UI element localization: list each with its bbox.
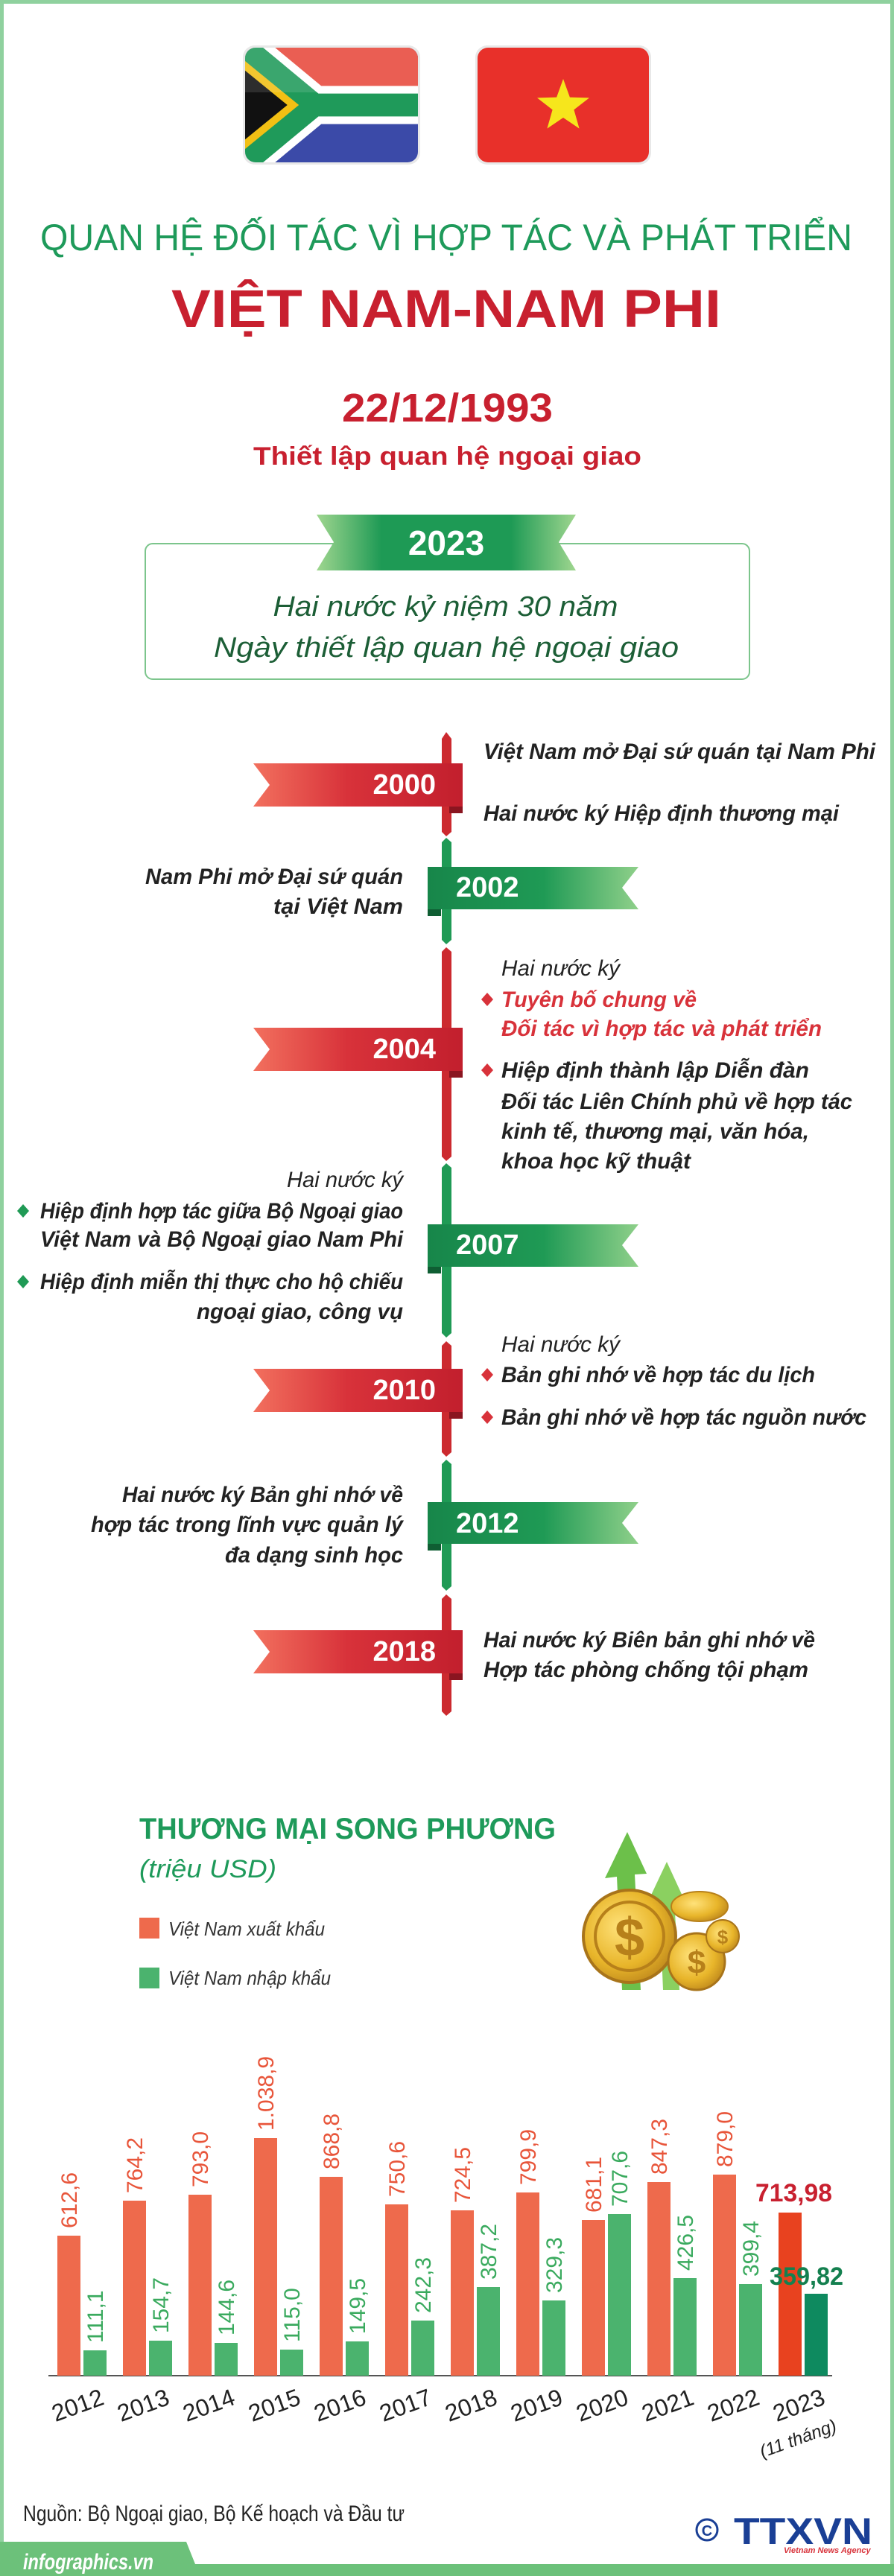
value labels: imports: 144,6 [215, 2280, 239, 2335]
value labels: imports: 329,3 [542, 2237, 567, 2293]
date: 22/12/1993 [342, 386, 553, 430]
value labels: imports: 707,6 [608, 2151, 633, 2207]
ribbon: 2018 [253, 1630, 463, 1680]
ribbon: 2012 [428, 1502, 638, 1551]
title [40, 216, 852, 339]
timeline 2018: Hợp tác phòng chống tội phạm [484, 1658, 808, 1682]
value labels: exports: 847,3 [647, 2119, 672, 2175]
baseline [48, 2375, 832, 2376]
ribbon: 2023: 2023 [408, 524, 484, 562]
year labels: 2023 [770, 2384, 828, 2427]
legend [139, 1918, 331, 1989]
bars: imports (green) [83, 2214, 828, 2376]
value labels: exports: 799,9 [516, 2129, 541, 2185]
bar chart [48, 2056, 843, 2462]
value labels: exports: 724,5 [451, 2147, 475, 2203]
timeline 2000 [253, 740, 876, 826]
source: Nguồn: Bộ Ngoại giao, Bộ Kế hoạch và Đầu tư [23, 2502, 405, 2526]
legend: Việt Nam nhập khẩu [168, 1967, 331, 1989]
timeline 2004: Hai nước ký [501, 956, 621, 981]
icon: coins with arrows [583, 1832, 739, 1990]
bullet: foreign ministry agreement [17, 1199, 404, 1252]
value labels: imports: 149,5 [346, 2278, 370, 2334]
value labels: 2023 [755, 2179, 843, 2291]
timeline 2004 [253, 956, 852, 1174]
heading: bilateral trade: THƯƠNG MẠI SONG PHƯƠNG [139, 1813, 556, 1845]
year labels: 2019 [507, 2384, 566, 2427]
date: Thiết lập quan hệ ngoại giao [253, 442, 641, 471]
heading: bilateral trade: (triệu USD) [139, 1855, 276, 1883]
ribbon: 2010: 2010 [372, 1375, 436, 1406]
year labels: 2018 [442, 2384, 501, 2427]
timeline 2000: Việt Nam mở Đại sứ quán tại Nam Phi [484, 740, 876, 764]
timeline 2012: Hai nước ký Bản ghi nhớ về [122, 1483, 403, 1507]
timeline 2010: Hai nước ký [501, 1332, 621, 1357]
value labels: exports: 750,6 [385, 2141, 410, 2197]
bullet: joint statement: Đối tác vì hợp tác và phát triển [501, 1017, 822, 1041]
bullet: forum agreement: kinh tế, thương mại, văn hóa, [501, 1119, 809, 1144]
timeline 2018: Hai nước ký Biên bản ghi nhớ về [484, 1628, 815, 1653]
bullet: forum agreement: khoa học kỹ thuật [501, 1149, 692, 1174]
bullet: foreign ministry agreement: Hiệp định hợp tác giữa Bộ Ngoại giao [40, 1199, 403, 1224]
icon: coins with arrows: $ [717, 1926, 729, 1948]
ribbon: 2004 [253, 1028, 463, 1078]
ribbon: 2000: 2000 [372, 769, 436, 801]
ribbon: 2010 [253, 1369, 463, 1419]
year labels: 2016 [311, 2384, 370, 2427]
timeline axis [442, 732, 451, 1716]
footer [0, 2542, 894, 2576]
ribbon: 2004: 2004 [372, 1034, 436, 1065]
legend: Việt Nam xuất khẩu [168, 1918, 325, 1940]
bullet: forum agreement [481, 1058, 852, 1174]
value labels: exports [57, 2056, 738, 2228]
ribbon: 2007 [428, 1224, 638, 1273]
value labels: exports: 764,2 [123, 2137, 148, 2193]
timeline 2012: hợp tác trong lĩnh vực quản lý [91, 1513, 404, 1537]
callout: 2023 anniversary: Ngày thiết lập quan hệ ngoại giao [214, 632, 679, 664]
timeline 2007 [17, 1168, 638, 1324]
value labels: imports [83, 2151, 764, 2343]
ribbon: 2018: 2018 [372, 1636, 436, 1667]
icon: coins with arrows: $ [688, 1944, 706, 1981]
title: VIỆT NAM-NAM PHI [171, 279, 721, 339]
ribbon: 2002 [428, 867, 638, 916]
timeline 2012: đa dạng sinh học [225, 1543, 403, 1568]
ribbon: 2007: 2007 [456, 1230, 519, 1261]
year labels: 2017 [376, 2384, 435, 2427]
bullet: joint statement [481, 988, 822, 1041]
bars: exports (red) [57, 2138, 802, 2376]
bullet: visa exemption: ngoại giao, công vụ [197, 1300, 403, 1324]
timeline 2018 [253, 1628, 815, 1682]
bullet: visa exemption: Hiệp định miễn thị thực cho hộ chiếu [40, 1269, 403, 1294]
ribbon: 2000 [253, 763, 463, 813]
timeline 2010 [253, 1332, 866, 1430]
flag: South Africa [243, 45, 420, 165]
timeline 2000: Hai nước ký Hiệp định thương mại [484, 801, 840, 826]
bullet: visa exemption [17, 1269, 403, 1324]
logo: TTXVN: C [702, 2523, 712, 2540]
timeline 2002: tại Việt Nam [273, 894, 403, 919]
value labels: imports: 426,5 [673, 2215, 698, 2271]
logo: TTXVN: Vietnam News Agency [784, 2546, 871, 2555]
bullet: tourism MoU: Bản ghi nhớ về hợp tác du lịch [501, 1363, 815, 1387]
year labels: 2013 [114, 2384, 173, 2427]
value labels: imports: 399,4 [739, 2221, 764, 2277]
footer: infographics.vn [23, 2550, 153, 2575]
value labels: imports: 387,2 [477, 2224, 501, 2280]
value labels: exports: 681,1 [582, 2157, 606, 2213]
value labels: 2023: 713,98 [755, 2179, 832, 2207]
value labels: imports: 115,0 [280, 2288, 305, 2342]
title: QUAN HỆ ĐỐI TÁC VÌ HỢP TÁC VÀ PHÁT TRIỂN [40, 216, 852, 258]
logo: TTXVN [697, 2510, 872, 2555]
ribbon: 2012: 2012 [456, 1508, 519, 1539]
value labels: exports: 879,0 [713, 2111, 738, 2167]
timeline 2002 [145, 865, 638, 919]
timeline 2007: Hai nước ký [287, 1168, 405, 1192]
year labels: (11 tháng) [757, 2416, 840, 2462]
year labels: 2021 [638, 2384, 697, 2427]
year labels [48, 2384, 840, 2462]
date [253, 386, 641, 471]
bullet: forum agreement: Hiệp định thành lập Diễn đàn [501, 1058, 809, 1083]
value labels: 2023: 359,82 [770, 2262, 843, 2291]
year labels: 2022 [704, 2384, 763, 2427]
timeline 2012 [91, 1483, 638, 1568]
bullet: forum agreement: Đối tác Liên Chính phủ về hợp tác [501, 1090, 852, 1114]
bullet: water MoU: Bản ghi nhớ về hợp tác nguồn nước [501, 1405, 866, 1430]
heading: bilateral trade [139, 1813, 556, 1883]
callout: 2023 anniversary [145, 515, 749, 679]
value labels: imports: 242,3 [411, 2257, 436, 2313]
value labels: exports: 612,6 [57, 2172, 82, 2228]
timeline 2002: Nam Phi mở Đại sứ quán [145, 865, 403, 889]
value labels: exports: 1.038,9 [254, 2056, 279, 2131]
bullet: joint statement: Tuyên bố chung về [501, 988, 697, 1012]
icon: coins with arrows: $ [615, 1908, 644, 1968]
year labels: 2020 [573, 2384, 632, 2427]
value labels: imports: 154,7 [149, 2277, 174, 2333]
value labels: exports: 868,8 [320, 2114, 344, 2169]
ribbon: 2002: 2002 [456, 872, 519, 903]
bullet: foreign ministry agreement: Việt Nam và Bộ Ngoại giao Nam Phi [40, 1227, 404, 1252]
flag: Viet Nam [475, 45, 651, 165]
value labels: exports: 793,0 [188, 2131, 213, 2187]
logo: TTXVN: TTXVN [734, 2510, 872, 2552]
ribbon: 2023 [317, 515, 576, 570]
callout: 2023 anniversary: Hai nước kỷ niệm 30 năm [273, 591, 618, 623]
year labels: 2014 [180, 2384, 238, 2427]
year labels: 2012 [48, 2384, 107, 2427]
value labels: imports: 111,1 [83, 2290, 108, 2343]
year labels: 2015 [245, 2384, 304, 2427]
